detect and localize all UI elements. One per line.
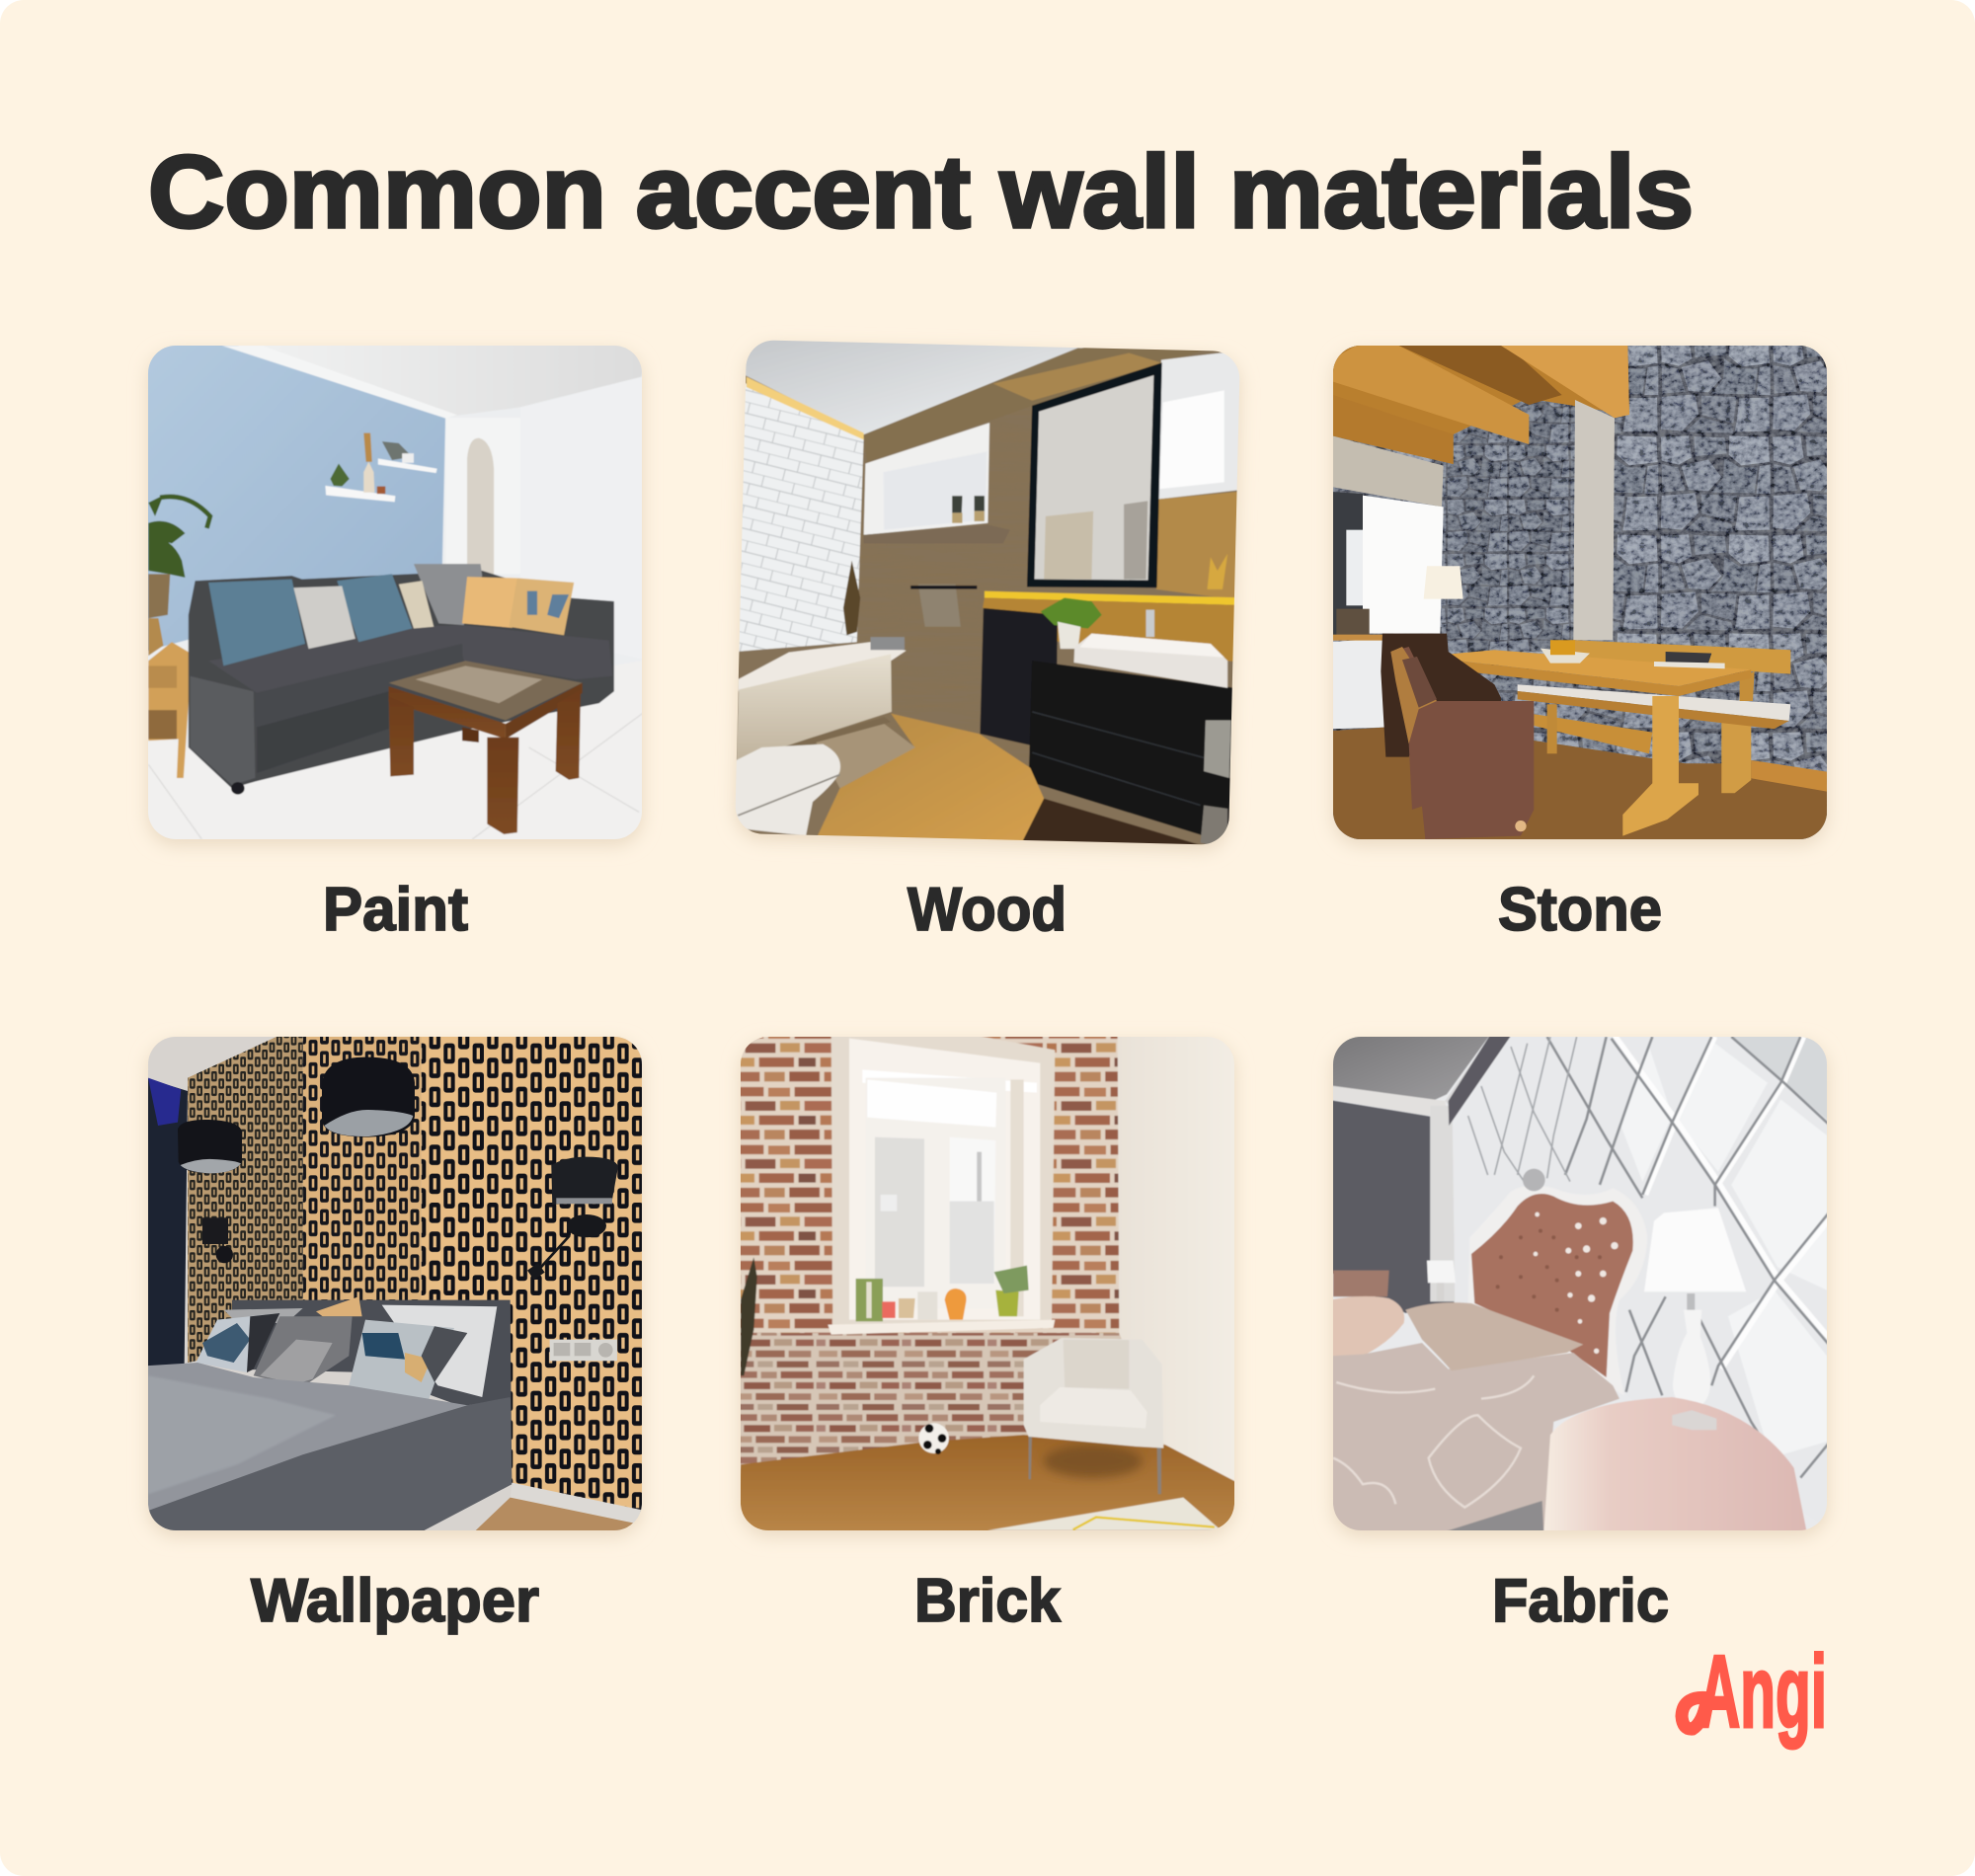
panel: fabric [1330, 1034, 1834, 1635]
panel: wallpaper [145, 1034, 649, 1635]
title: Common accent wall materials [148, 135, 1694, 250]
photo: brick wall room [738, 1034, 1241, 1533]
panel: brick [738, 1034, 1241, 1635]
logo wordmark: Angi [1698, 1635, 1827, 1750]
photo shadow: paint [148, 352, 642, 845]
label: Stone: Stone [1498, 876, 1662, 944]
photo: paint living room [142, 340, 649, 849]
label: Wallpaper: Wallpaper [251, 1567, 539, 1635]
photo shadow: wallpaper [148, 1043, 642, 1536]
photo shadow: fabric [1333, 1043, 1827, 1536]
panel: paint [142, 340, 649, 944]
photo shadow: stone [1333, 352, 1827, 845]
photo: fabric bedroom [1330, 1034, 1834, 1537]
panel: stone [1330, 343, 1834, 944]
photo shadow: wood [735, 346, 1240, 851]
label: Brick: Brick [914, 1567, 1061, 1635]
photo: wood bathroom [728, 333, 1248, 853]
label: Wood: Wood [908, 876, 1066, 944]
logo swash [1682, 1697, 1710, 1729]
label: Paint: Paint [323, 876, 468, 944]
label: Fabric: Fabric [1492, 1567, 1669, 1635]
photo: stone dining room [1330, 343, 1834, 846]
photo: wallpaper bedroom [145, 1034, 649, 1537]
logo: Angi [1682, 1635, 1827, 1750]
panel: wood [728, 333, 1248, 944]
photo shadow: brick [741, 1043, 1234, 1536]
